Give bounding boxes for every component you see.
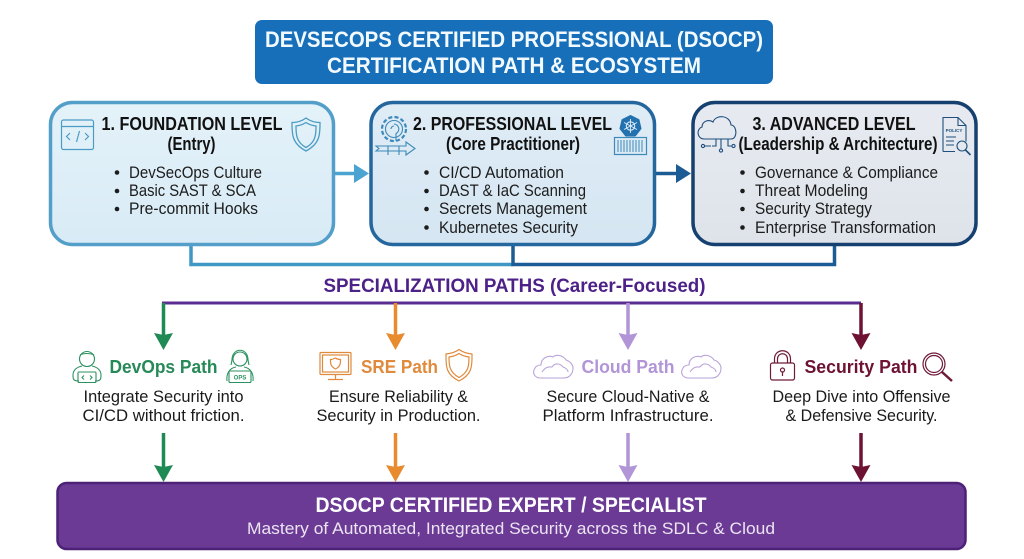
title: CERTIFICATION PATH & ECOSYSTEM <box>327 53 701 78</box>
list: foundation topics <box>115 164 262 218</box>
panel: devops path <box>73 350 253 425</box>
list: foundation topics: DevSecOps Culture <box>129 164 262 182</box>
icon: code window <box>62 120 94 150</box>
list: professional topics: DAST & IaC Scanning <box>439 182 586 200</box>
text: mastery subtitle: Mastery of Automated, Integrated Security across the SDLC & Cloud <box>247 519 775 538</box>
list: advanced topics: Enterprise Transformation <box>755 219 936 237</box>
heading: certified expert: DSOCP CERTIFIED EXPERT / SPECIALIST <box>316 494 707 517</box>
icon: cloud left <box>534 355 573 378</box>
heading: advanced level: 3. ADVANCED LEVEL <box>752 114 916 134</box>
list: professional topics: CI/CD Automation <box>439 164 564 182</box>
title <box>255 20 773 84</box>
panel: certified expert banner <box>58 483 966 549</box>
connector: professional and advanced to specialization <box>513 245 834 264</box>
arrow: devops to expert <box>154 433 173 482</box>
heading: leadership and architecture: (Leadership & Architecture) <box>738 134 938 154</box>
text: cloud description <box>542 388 714 425</box>
heading: security path: Security Path <box>804 356 918 377</box>
text: sre description: Ensure Reliability & <box>329 388 468 406</box>
text: sre description: Security in Production. <box>316 407 480 425</box>
heading: core practitioner: (Core Practitioner) <box>446 134 580 154</box>
text: devops description <box>82 388 244 425</box>
icon: shield <box>446 350 472 381</box>
list: advanced topics <box>740 164 938 237</box>
panel: security path <box>770 351 952 425</box>
list: foundation topics: Basic SAST & SCA <box>129 182 256 200</box>
icon: gear pipeline <box>376 117 415 155</box>
icon: kubernetes <box>620 116 640 136</box>
arrow: professional to advanced <box>656 164 691 183</box>
text: security description: Deep Dive into Offensive <box>772 388 950 406</box>
icon: policy document: POLICY <box>946 128 962 133</box>
arrow: cloud to expert <box>618 433 638 482</box>
panel: advanced level <box>693 102 976 244</box>
list: foundation topics: Pre-commit Hooks <box>129 200 258 218</box>
heading: sre path: SRE Path <box>361 356 438 377</box>
heading: specialization paths: SPECIALIZATION PATHS (Career-Focused) <box>324 275 706 297</box>
text: devops description: CI/CD without friction. <box>82 407 244 425</box>
icon: magnifier <box>923 353 952 381</box>
text: cloud description: Secure Cloud-Native & <box>546 388 710 406</box>
text: devops description: Integrate Security into <box>84 388 244 406</box>
panel: professional level <box>371 102 654 244</box>
list: advanced topics: Threat Modeling <box>755 182 868 200</box>
heading: entry: (Entry) <box>168 134 216 154</box>
icon: developer <box>73 352 101 382</box>
text: cloud description: Platform Infrastructure. <box>542 407 714 425</box>
text: security description <box>772 388 950 425</box>
heading: foundation level: 1. FOUNDATION LEVEL <box>102 114 282 134</box>
arrow: security to expert <box>852 433 870 482</box>
heading: devops path: DevOps Path <box>110 356 218 377</box>
panel: foundation level <box>50 102 334 244</box>
list: professional topics: Kubernetes Security <box>439 219 579 237</box>
arrow: foundation to professional <box>335 164 369 183</box>
list: professional topics: Secrets Management <box>439 200 587 218</box>
list: professional topics <box>424 164 587 237</box>
icon: cloud network <box>698 117 736 152</box>
list: advanced topics: Governance & Compliance <box>755 164 938 182</box>
connector: specialization bus <box>162 302 861 304</box>
text: sre description <box>316 388 480 425</box>
arrow: sre to expert <box>386 433 405 482</box>
panel: sre path <box>316 350 480 425</box>
heading: professional level: 2. PROFESSIONAL LEVEL <box>413 114 612 134</box>
arrow: to devops path <box>154 303 173 350</box>
icon: ops engineer: OPS <box>234 376 246 382</box>
icon: shield <box>292 118 320 151</box>
arrow: to sre path <box>386 303 405 350</box>
arrow: to cloud path <box>618 303 638 350</box>
icon: padlock <box>770 351 794 380</box>
panel: cloud path <box>534 355 721 425</box>
connector: foundation to specialization <box>191 245 513 264</box>
icon: monitor shield <box>320 352 351 380</box>
icon: policy document <box>943 118 970 155</box>
icon: ops engineer <box>227 350 253 382</box>
icon: container <box>614 138 646 154</box>
list: advanced topics: Security Strategy <box>755 200 873 218</box>
text: security description: & Defensive Security. <box>786 407 938 425</box>
icon: cloud right <box>682 355 721 378</box>
arrow: to security path <box>852 303 870 350</box>
title: DEVSECOPS CERTIFIED PROFESSIONAL (DSOCP) <box>265 27 763 52</box>
heading: cloud path: Cloud Path <box>582 356 674 377</box>
